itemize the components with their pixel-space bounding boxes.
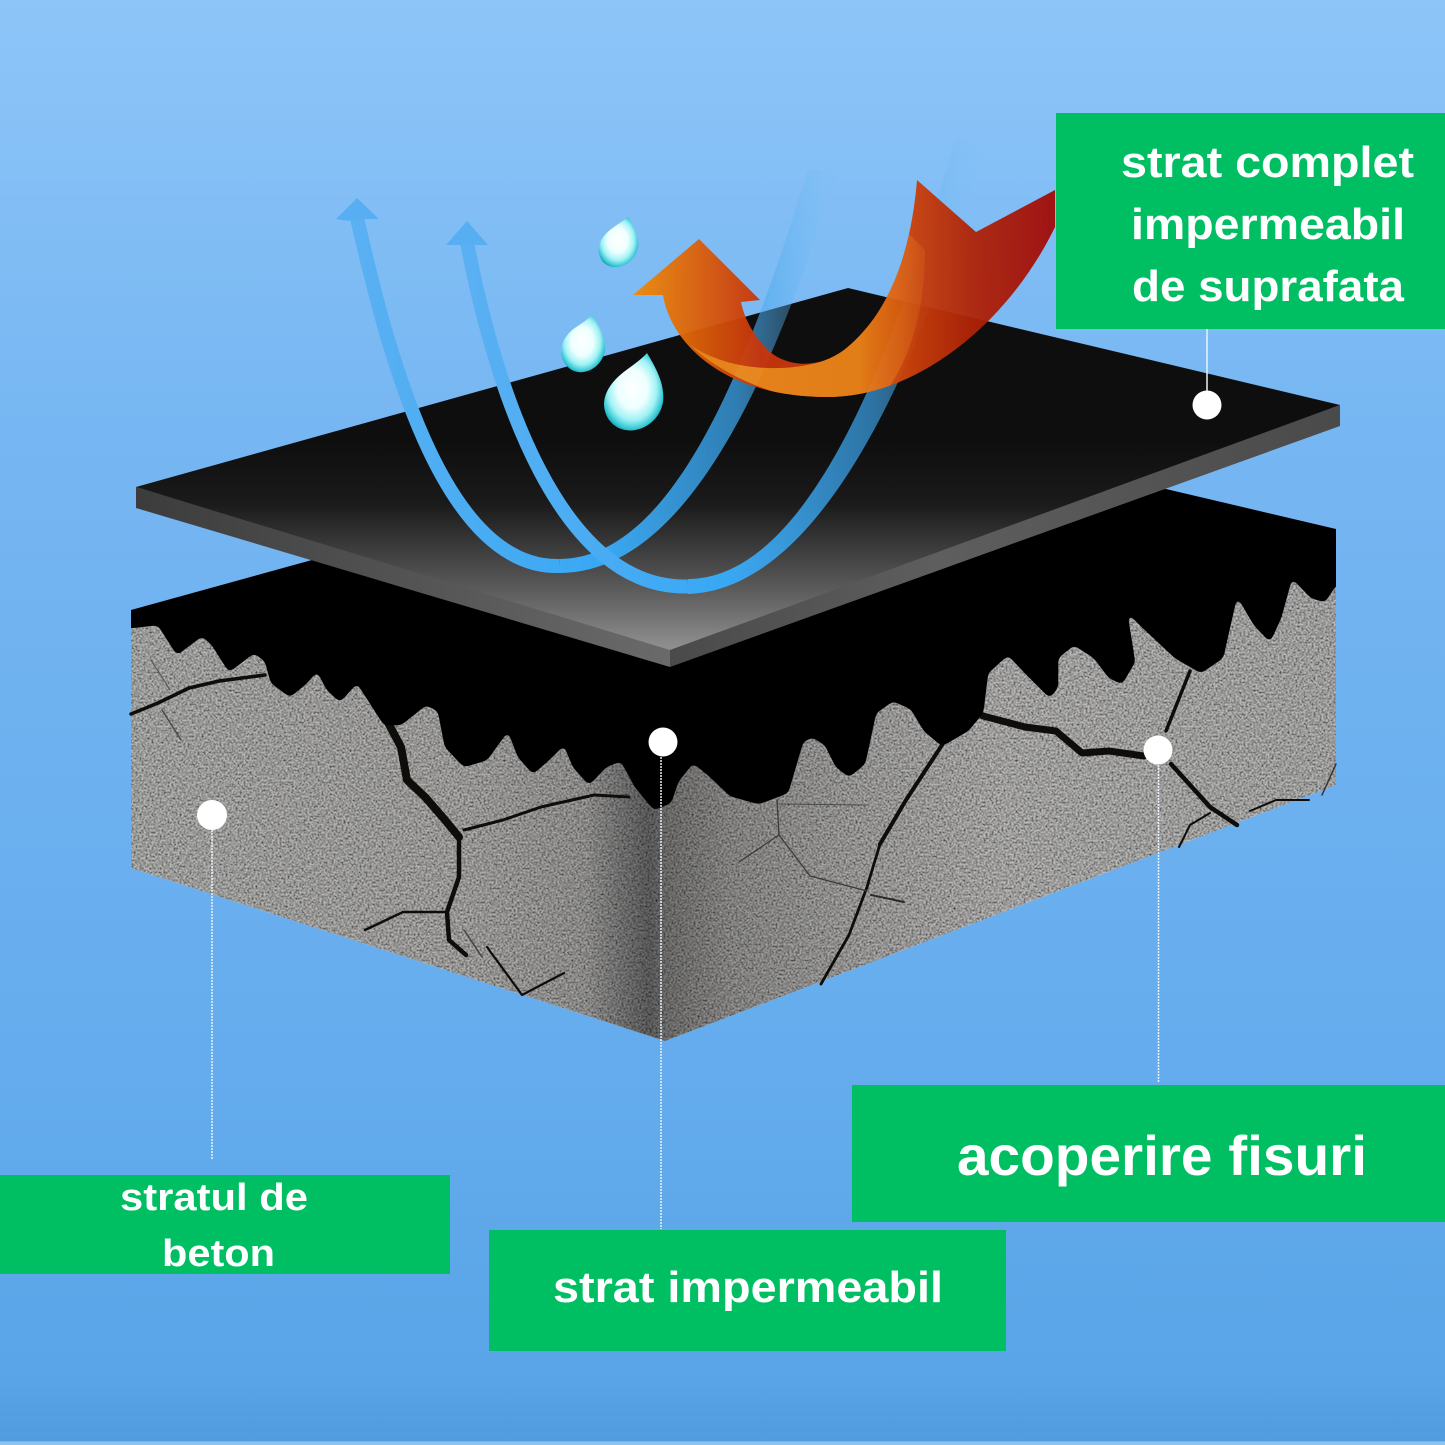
marker: [1192, 390, 1222, 420]
label text: beton: [162, 1233, 275, 1275]
top waterproof sheet: [136, 288, 1340, 667]
blue arrow two: [446, 140, 985, 594]
concrete block: [90, 465, 1380, 1041]
sheet top face: [136, 288, 1340, 650]
marker: [1144, 736, 1172, 764]
label text: [1121, 138, 1414, 311]
blue arrows: [336, 140, 985, 594]
leader line: [211, 815, 213, 1160]
label text: stratul de: [120, 1177, 308, 1219]
sheet left edge: [136, 487, 670, 667]
label box: [0, 1175, 450, 1274]
label text: impermeabil: [1131, 200, 1405, 249]
marker: [197, 800, 227, 830]
concrete left face: [131, 616, 665, 1041]
leader line: [660, 742, 662, 1229]
drop middle: [561, 315, 605, 372]
callout: crack covering: [852, 736, 1445, 1222]
callout: waterproof layer: [489, 728, 1006, 1351]
label text: acoperire fisuri: [957, 1124, 1367, 1187]
label text: de suprafata: [1132, 262, 1405, 311]
marker: [648, 728, 678, 756]
label text: [120, 1177, 308, 1275]
label box: [489, 1230, 1006, 1351]
callout: concrete layer: [0, 800, 450, 1275]
callout: surface layer: [1056, 113, 1445, 420]
label text: strat complet: [1121, 138, 1414, 187]
water drops: [561, 217, 663, 430]
label box: [1056, 113, 1445, 329]
label text: strat impermeabil: [553, 1263, 943, 1312]
leader line: [1158, 750, 1160, 1083]
sheet right edge: [670, 405, 1340, 667]
orange arrow: [633, 180, 1055, 403]
concrete right face: [665, 540, 1336, 1041]
drop bottom: [604, 353, 663, 430]
blue arrow one: [336, 170, 838, 573]
drop top: [599, 217, 638, 267]
label box: [852, 1085, 1445, 1222]
waterproof black layer with drips: [131, 489, 1336, 809]
cracks: [131, 660, 1336, 995]
leader line: [1206, 329, 1208, 405]
